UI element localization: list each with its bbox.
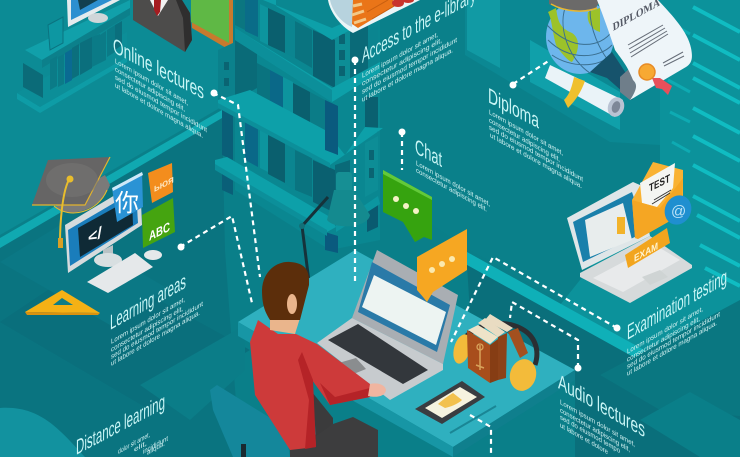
label: examination testing: Lorem ipsum dolor sit amet, [627,304,703,356]
label: access to the e-library: sed do eiusmod tempor incididunt [362,35,458,96]
person [250,262,386,457]
label: online lectures [113,33,208,140]
label: diploma: Lorem ipsum dolor sit amet, [489,107,563,157]
laptop [317,250,458,400]
triangle ruler [25,290,100,315]
label: distance learning (cut off by the frame, only visible words kept): elit, [134,438,147,454]
label: diploma: Diploma [488,83,539,133]
label: distance learning (cut off by the frame, only visible words kept): Distance learning [76,389,165,457]
label: audio lectures [558,369,645,456]
globe with graduation cap [546,0,637,100]
examination icons: @ [671,203,686,220]
label: diploma: ut labore et dolore magna aliqua. [490,130,582,190]
label: online lectures: Lorem ipsum dolor sit amet, [115,57,188,107]
label: chat: consectetur adipiscing elit. [416,165,487,214]
learning areas icons [32,157,175,293]
label: chat [415,134,490,214]
label: learning areas: Learning areas [110,269,186,335]
chat bubble: green [383,170,432,242]
label: examination testing: sed do eiusmod tempor incididunt [627,309,721,371]
lamp [299,172,370,319]
label: learning areas: sed do eiusmod tempor incididunt [111,299,204,361]
label: learning areas: Lorem ipsum dolor sit amet, [111,295,185,346]
teacher [133,0,192,52]
label: online lectures: Online lectures [113,33,204,104]
e-library books [328,0,420,33]
label: online lectures: consectetur adipiscing elit, [115,65,185,113]
learning areas icons: </ [88,223,102,248]
label: examination testing [627,264,727,378]
label: distance learning (cut off by the frame, only visible words kept) [76,389,169,457]
learning areas icons: ABC [149,219,170,244]
window blinds [668,7,740,286]
label: online lectures: ut labore et dolore magna aliqua. [115,81,203,140]
desk [238,250,575,457]
top-left shelf with monitor and books [17,0,130,113]
label: diploma [488,83,584,190]
label: learning areas: consectetur adipiscing elit, [111,304,183,354]
label: learning areas: ut labore et dolore magna aliqua. [111,308,200,368]
dotted connector lines [178,56,620,456]
label: distance learning (cut off by the frame, only visible words kept): aliqua. [147,439,165,457]
examination icons [567,162,696,303]
label: chat: Chat [415,134,442,172]
examination icons: EXAM [634,240,658,265]
chair [210,385,290,457]
learning areas icons: 你 [115,190,139,217]
label: distance learning (cut off by the frame, only visible words kept): dolor sit amet, [118,430,150,456]
pen [450,406,496,433]
chat bubble: yellow [417,229,467,302]
bookshelf [215,0,383,253]
label: access to the e-library [362,0,476,104]
diploma sheet [597,0,692,100]
label: access to the e-library: consectetur adipiscing elit, [362,35,442,88]
label: examination testing: consectetur adipiscing elit, [627,314,700,364]
examination icons: TEST [649,172,670,195]
rolled diploma [545,65,627,119]
label: audio lectures: Lorem ipsum dolor sit amet, [560,398,635,449]
learning areas icons: ЬЮЯ [154,175,174,194]
label: chat: Lorem ipsum dolor sit amet, [416,158,490,208]
label: learning areas [110,269,204,368]
label: distance learning (cut off by the frame, only visible words kept): incididunt [143,433,169,456]
green board [191,0,233,52]
smartphone [415,381,485,424]
headphones and books [450,314,540,394]
label: access to the e-library: ut labore et dolore magna aliqua. [362,45,453,104]
label: access to the e-library: Lorem ipsum dolor sit amet, [362,30,438,80]
label: examination testing: ut labore et dolore magna aliqua. [627,318,717,378]
label: diploma: sed do eiusmod tempor incididunt [489,122,584,184]
label: online lectures: sed do eiusmod tempor incididunt [115,73,208,135]
label: diploma: consectetur adipiscing elit, [489,115,560,164]
